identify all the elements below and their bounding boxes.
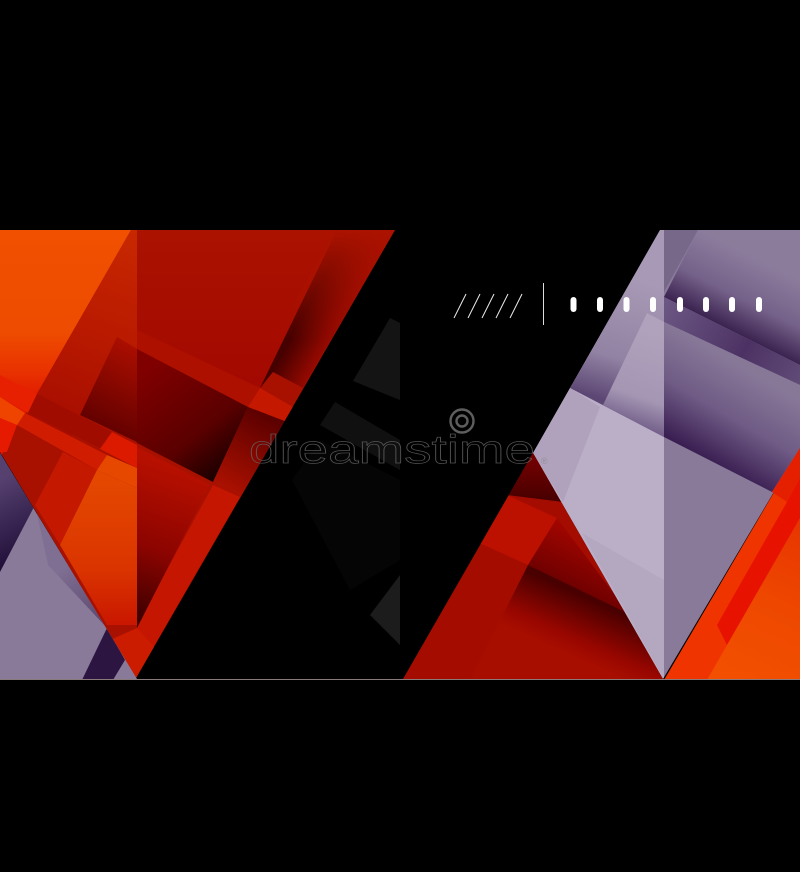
panel: red and orange left shape	[0, 230, 395, 680]
red lower wedge	[137, 447, 210, 628]
bright band right part	[248, 388, 293, 422]
upper cross band right bright	[100, 432, 137, 468]
watermark wordmark: dreamstime	[249, 428, 535, 472]
watermark	[249, 410, 548, 472]
abstract geometric infographic canvas	[0, 230, 800, 680]
dark centre	[137, 349, 248, 482]
dark purple band	[664, 297, 800, 385]
red left mid field	[7, 425, 18, 452]
upper cross band left bright	[0, 375, 37, 413]
red top field	[137, 230, 345, 388]
dark purple top	[0, 453, 35, 572]
panel: central black shapes	[292, 318, 400, 645]
upper cross band middle	[28, 394, 86, 441]
dark purple bottom	[82, 628, 125, 680]
shadowed red base	[470, 565, 663, 680]
pale bottom band	[664, 678, 665, 679]
icon: five slashes	[454, 294, 522, 318]
bright red edge	[0, 418, 17, 452]
bottom hairline	[0, 679, 800, 680]
red tip	[112, 628, 154, 678]
red diagonal stripe	[717, 478, 800, 645]
dark left quad	[80, 350, 137, 442]
middle dark purple field	[664, 322, 800, 492]
side red	[213, 407, 287, 498]
panel: red lower-right triangle	[400, 450, 670, 680]
orange gradient field	[707, 518, 800, 680]
grey shard centre	[292, 440, 400, 590]
panel: purple right shape	[530, 230, 800, 680]
red orange side	[35, 452, 97, 545]
red lower band	[137, 485, 240, 648]
orange band highlight right	[97, 455, 137, 488]
mid purple triangle	[37, 514, 104, 625]
red wedge	[528, 518, 630, 615]
panel: orange right corner	[664, 448, 800, 680]
panel: purple lower-left shape	[0, 450, 140, 680]
upper-left purple shadow	[570, 230, 664, 437]
red corner top fade	[288, 230, 395, 332]
icon: watermark spiral	[450, 410, 474, 432]
vertical divider	[543, 283, 544, 325]
lower cross band	[17, 413, 107, 470]
lower-left pale sliver	[533, 388, 600, 502]
red top tip	[772, 448, 800, 502]
top-right purple field	[664, 244, 800, 365]
watermark registered mark: ®	[541, 456, 548, 466]
grey shard lower	[370, 575, 400, 645]
icon: row of eight pills	[570, 297, 762, 312]
top purple triangle	[664, 230, 698, 292]
lighter inner panel	[603, 313, 664, 437]
red band	[477, 495, 557, 565]
grey shard upper	[353, 318, 400, 400]
orange band highlight left	[0, 397, 25, 425]
orange upper field	[0, 230, 131, 458]
dark red diagonal strip	[54, 230, 137, 380]
red corner shadow	[260, 230, 395, 388]
dark red tip	[507, 453, 563, 502]
faint band left part	[137, 334, 252, 384]
lower orange field	[60, 470, 137, 625]
grey shard middle	[320, 402, 400, 470]
